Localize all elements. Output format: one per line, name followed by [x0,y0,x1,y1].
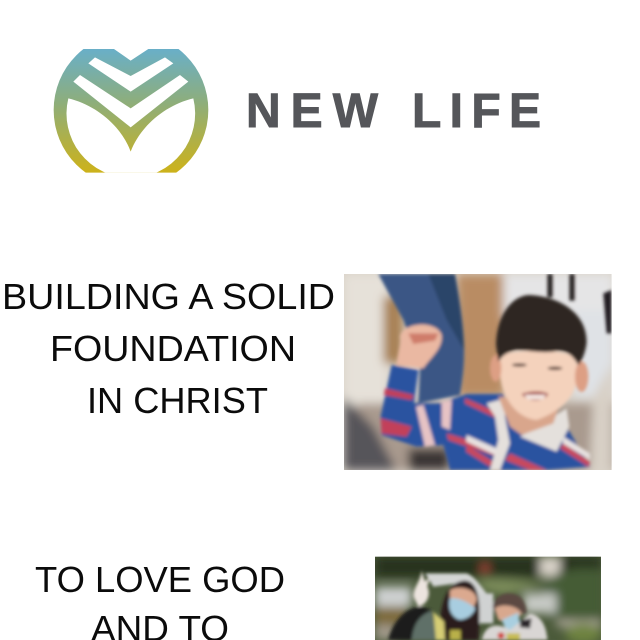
photo: two people in masks making peace signs [375,557,602,640]
logo wordmark: NEW [246,85,379,138]
heading: building a solid foundation in Christ: IN CHRIST [87,380,268,421]
neck and face [498,397,560,435]
eyes and mouth [512,363,527,367]
person right [493,593,527,617]
logo wordmark [246,85,541,138]
heading: building a solid foundation in Christ: FOUNDATION [50,328,296,369]
arm and fist [397,325,442,368]
logo wordmark: LIFE [412,85,541,138]
heading: to love God and to [35,559,285,640]
photo: smiling boy raising fist [344,274,617,470]
sleeve and shirt [381,365,590,470]
heading: building a solid foundation in Christ [2,276,335,421]
hair [496,295,587,365]
heading: building a solid foundation in Christ: BUILDING A SOLID [2,276,335,317]
logo icon: leaf in circle [54,49,208,173]
person left [438,581,480,640]
heading: to love God and to: TO LOVE GOD [35,559,285,600]
